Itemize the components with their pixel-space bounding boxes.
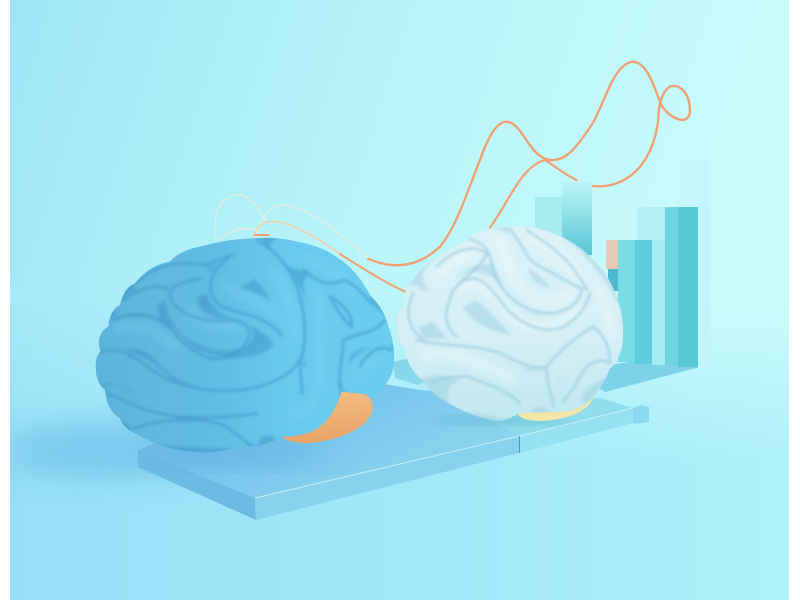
shadow under white brain [430,415,570,425]
platform top [138,375,633,498]
brain sulci [100,240,390,447]
pale tall bar [677,160,710,208]
seam [518,436,520,453]
bar chart [393,160,710,392]
gyri highlights [423,237,610,380]
strand behind white brain [255,235,405,292]
strand into brain [253,221,340,254]
teal block [608,269,618,291]
base under bars [596,360,700,392]
right top plate highlight [470,398,633,436]
yellow cerebellum, white brain [516,392,595,421]
floor shadow [0,422,220,478]
pale strands near blue brain [215,195,368,258]
front face [255,436,519,520]
platform [138,375,649,520]
floor [10,342,789,600]
peach block [606,240,618,269]
left face [138,450,256,520]
back platform [393,358,430,385]
returning curve [490,160,577,227]
orange connecting line [215,62,690,292]
edge highlight [255,408,633,498]
shadow under blue brain [140,438,330,462]
bar f [698,207,710,368]
gyri folds [100,245,387,438]
bar upper mid pale [637,207,665,240]
bar pale left [535,197,562,237]
blue brain [96,238,394,452]
bar e [678,207,698,367]
main curve [368,62,690,265]
brain body [96,238,394,452]
peach cerebellum, blue brain [282,388,373,443]
bar b [635,240,652,364]
bar c [652,240,665,365]
brain sulci [409,230,610,407]
bar d [665,207,678,365]
end face [633,405,649,424]
white brain [396,226,623,421]
gyri folds [407,237,617,407]
bar a [618,240,635,362]
second face [520,408,633,453]
brain body [396,226,623,421]
bar upper left pale [608,207,637,240]
bar teal [562,182,592,255]
gyri highlights [120,286,238,346]
